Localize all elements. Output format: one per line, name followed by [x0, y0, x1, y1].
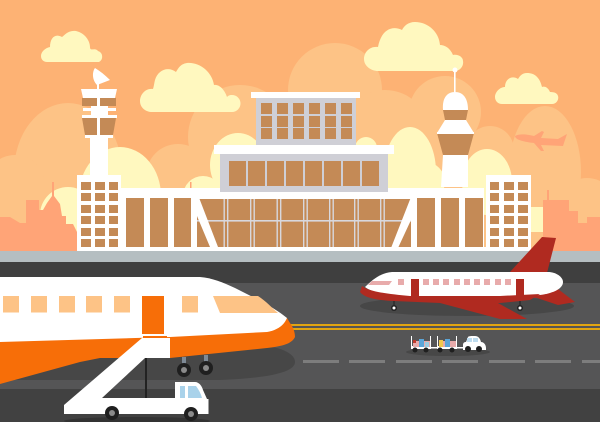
tower dome	[443, 92, 468, 110]
stair platform rail	[143, 336, 167, 338]
right wing panels	[417, 198, 483, 248]
mid storey windows	[229, 161, 379, 186]
runway dashes	[303, 360, 600, 363]
runway centre double line	[290, 324, 600, 330]
tower base bar	[85, 135, 113, 138]
tower shaft	[90, 137, 108, 176]
hall lower sill	[120, 247, 486, 251]
sunlit cream clouds	[40, 127, 543, 245]
right diagonal brace	[391, 197, 417, 248]
top storey	[256, 97, 356, 145]
tower lower band	[82, 115, 117, 118]
small plane silhouette	[515, 131, 567, 151]
top storey windows	[261, 103, 352, 139]
skyline right	[543, 190, 600, 252]
skyline left	[0, 182, 77, 252]
red plane	[360, 237, 575, 319]
left diagonal brace	[191, 195, 218, 248]
apron strip	[0, 251, 600, 262]
central glass hall	[197, 199, 411, 247]
tow bars	[431, 347, 437, 348]
cab windows	[180, 386, 185, 398]
cockpit window	[368, 281, 392, 285]
mid storey roof	[214, 145, 394, 154]
wing	[440, 303, 527, 319]
far tarmac	[0, 262, 600, 284]
floating clouds	[41, 22, 558, 112]
windows	[3, 296, 198, 312]
tower cab	[437, 133, 474, 155]
truck wheels	[105, 406, 119, 420]
landing gear	[391, 301, 523, 311]
boarding stairs and truck body	[64, 338, 208, 414]
cloud 2	[140, 63, 240, 112]
ground shadow	[360, 296, 574, 316]
tail fin	[510, 237, 556, 273]
baggage train	[406, 336, 490, 356]
tower shaft	[441, 155, 468, 187]
tower neck	[437, 120, 474, 133]
left block	[77, 175, 121, 251]
rear stabilizer	[520, 289, 575, 305]
stair truck	[64, 336, 210, 422]
big plane shadow	[0, 345, 295, 380]
door	[142, 296, 164, 334]
landing gear struts	[182, 357, 186, 364]
cloud 3	[364, 22, 463, 71]
tower lower windows	[82, 118, 97, 135]
antenna	[454, 70, 456, 94]
tower side bars	[83, 108, 116, 111]
top storey roof	[251, 92, 360, 98]
cockpit window	[213, 296, 278, 313]
white fuselage	[0, 277, 287, 342]
dome band	[443, 110, 468, 120]
left wing panels	[126, 198, 191, 248]
fuselage	[365, 272, 563, 297]
radar mast	[97, 82, 99, 90]
main tarmac	[0, 283, 600, 389]
radar dish	[93, 68, 110, 85]
cloud 1	[41, 31, 102, 62]
terminal base	[77, 176, 484, 251]
left control tower	[81, 68, 117, 176]
landing gear wheels	[177, 363, 191, 377]
terminal building	[77, 92, 531, 251]
orange belly	[0, 318, 295, 384]
door stripes	[411, 279, 419, 297]
right block	[486, 175, 531, 251]
first cart	[411, 336, 431, 349]
windows	[398, 279, 511, 285]
antenna tip	[452, 68, 458, 72]
tower roof band	[81, 89, 117, 98]
stair support post	[145, 358, 147, 398]
right block windows	[490, 182, 528, 247]
roof mast	[190, 182, 192, 188]
cloud 4	[495, 73, 558, 104]
cart wheels	[412, 346, 482, 352]
tug car	[463, 336, 486, 350]
mid storey	[220, 153, 388, 192]
ground shadow	[64, 417, 210, 422]
right control tower	[437, 68, 474, 187]
shadow	[406, 348, 490, 356]
near tarmac	[0, 389, 600, 422]
tower upper windows	[82, 98, 97, 106]
belly stripe	[360, 286, 540, 303]
left block windows	[81, 182, 118, 247]
second cart	[437, 336, 457, 349]
tower centre core	[91, 106, 108, 116]
hall mullions	[197, 199, 411, 247]
background clouds	[0, 43, 600, 255]
big orange plane	[0, 277, 295, 384]
